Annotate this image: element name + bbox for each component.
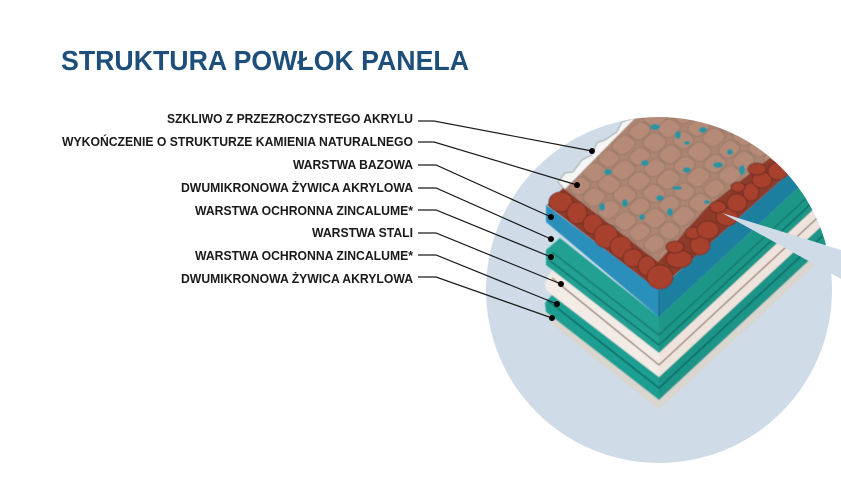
label: steel layer (312, 226, 564, 287)
layer: base (545, 174, 798, 318)
red stone border (547, 158, 790, 290)
label: base layer: WARSTWA BAZOWA (293, 158, 413, 172)
layer: steel (544, 210, 820, 378)
label: acrylic glaze (167, 112, 595, 154)
glaze strip (558, 116, 640, 190)
title: STRUKTURA POWŁOK PANELA (61, 45, 469, 76)
label: natural stone finish (62, 134, 580, 188)
label: zincalume lower: WARSTWA OCHRONNA ZINCALUME* (195, 249, 413, 263)
layer: lower grey resin (546, 244, 826, 410)
background circle (486, 117, 832, 463)
stone surface (564, 117, 776, 262)
label: natural stone finish: WYKOŃCZENIE O STRUKTURZE KAMIENIA NATURALNEGO (62, 134, 413, 149)
label: zincalume lower (195, 249, 560, 307)
layer: lower zincalume (544, 226, 826, 400)
label: acrylic resin lower (181, 271, 555, 321)
leader lines and labels (62, 112, 595, 321)
layer: upper zincalume (545, 187, 813, 354)
label: base layer (293, 158, 554, 220)
callout wedge (722, 213, 841, 279)
label: zincalume upper: WARSTWA OCHRONNA ZINCALUME* (195, 204, 413, 218)
label: zincalume upper (195, 204, 554, 260)
teal gaps between stones (599, 124, 745, 220)
label: acrylic resin upper: DWUMIKRONOWA ŻYWICA AKRYLOWA (181, 180, 413, 195)
label: acrylic glaze: SZKLIWO Z PRZEZROCZYSTEGO AKRYLU (167, 112, 413, 126)
label: steel layer: WARSTWA STALI (312, 226, 413, 240)
label: acrylic resin upper (181, 180, 554, 242)
layered panel illustration (544, 117, 826, 410)
label: acrylic resin lower: DWUMIKRONOWA ŻYWICA AKRYLOWA (181, 271, 413, 286)
